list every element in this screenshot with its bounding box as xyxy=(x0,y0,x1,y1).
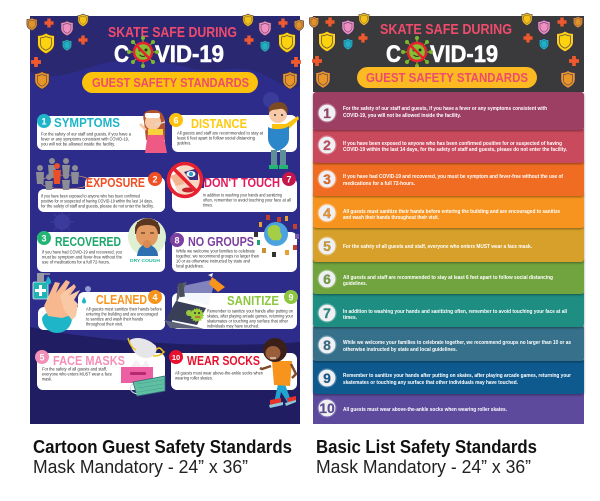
icon: coughing man xyxy=(128,218,166,256)
card 7: don't touch: DON'T TOUCH xyxy=(204,175,280,190)
band 8: otherwise instructed by state and local guidelines. xyxy=(343,347,458,353)
card 7: don't touch xyxy=(167,162,297,212)
band 10 xyxy=(313,390,584,424)
heading pill: GUEST SAFETY STANDARDS xyxy=(366,70,528,85)
icon: no touching face xyxy=(167,162,203,198)
caption: basic list poster: Basic List Safety Standards xyxy=(316,437,537,457)
card 3: recovered: RECOVERED xyxy=(55,234,121,249)
card 9: sanitize: 9 xyxy=(288,292,294,302)
poster header background xyxy=(313,16,584,92)
card 8: no groups: local guidelines. xyxy=(176,264,204,268)
card 4: cleaned: CLEANED xyxy=(96,292,147,307)
card 7: don't touch: times. xyxy=(203,202,213,208)
title: SKATE SAFE DURING xyxy=(380,21,512,38)
icon: girl with thermometer xyxy=(140,110,167,153)
band 8: While we welcome your families to celebrate together, we recommend groups no larger than 10 or as xyxy=(343,340,571,346)
band 8: 8 xyxy=(323,337,331,353)
band 3: medications for a full 72-hours. xyxy=(343,181,416,187)
icon: girl on roller skates xyxy=(260,338,296,408)
card 2: exposure: positive for or suspected of having COVID-19 within the last 14 days, xyxy=(41,198,153,204)
band 7: times. xyxy=(343,315,358,321)
panel: basic list poster xyxy=(309,13,584,424)
band 5 xyxy=(313,225,584,262)
card 3: recovered xyxy=(37,218,166,272)
card 4: cleaned xyxy=(33,273,165,333)
card 2: exposure: If you have been exposed to anyone who has been confirmed xyxy=(41,194,141,198)
band 10: All guests must wear above-the-ankle socks when wearing roller skates. xyxy=(343,407,508,413)
band 1: 1 xyxy=(323,105,331,121)
card 1: symptoms: For the safety of our staff and guests, if you have a xyxy=(41,132,132,136)
band 6: 6 xyxy=(323,271,331,287)
card 5: face masks xyxy=(35,338,165,396)
card 10: wear socks: wearing roller skates. xyxy=(175,376,213,380)
card 1: symptoms: you will not be allowed inside the facility. xyxy=(41,142,115,146)
card 1: symptoms: fever or any symptoms consistent with COVID-19, xyxy=(41,136,129,142)
title xyxy=(380,21,512,68)
card 5: face masks: 5 xyxy=(39,352,45,362)
heading pill: GUEST SAFETY STANDARDS xyxy=(92,75,249,90)
card 4: cleaned: All guests must sanitize their hands before xyxy=(86,306,163,312)
title: VID-19 xyxy=(155,41,224,68)
card 3: recovered: use of medications for a full 72-hours. xyxy=(42,260,110,264)
band 4: All guests must sanitize their hands before entering the building and are encouraged to sanitize xyxy=(343,209,560,215)
card 5: face masks: everyone who enters MUST wear a face xyxy=(42,372,113,376)
card 9: sanitize: skatemates or touching any surface that other xyxy=(207,318,289,324)
card 9: sanitize xyxy=(164,273,298,329)
card 8: no groups: 8 xyxy=(174,236,180,246)
card 8: no groups: NO GROUPS xyxy=(188,234,254,249)
band 3 xyxy=(313,159,584,196)
caption: basic list poster xyxy=(316,437,537,477)
card 2: exposure: 2 xyxy=(152,174,158,184)
title: VID-19 xyxy=(430,41,498,68)
icon: masks and tissue box xyxy=(121,338,165,396)
caption: cartoon poster: Cartoon Guest Safety Standards xyxy=(33,437,292,457)
heading pill xyxy=(357,67,537,88)
band 3: 3 xyxy=(323,171,331,187)
title: C xyxy=(114,41,129,68)
band 10: 10 xyxy=(319,400,335,416)
band 4: and wash their hands throughout their visit. xyxy=(343,215,440,221)
card 3: recovered: 3 xyxy=(41,234,47,244)
card 3: recovered: must be symptom and fever-free without the xyxy=(42,254,123,260)
card 10: wear socks: All guests must wear above-the-ankle socks when xyxy=(175,370,264,376)
band 4 xyxy=(313,192,584,228)
band 2: 2 xyxy=(323,137,331,153)
band 1 xyxy=(313,92,584,130)
card 9: sanitize: Remember to sanitize your hands after putting on xyxy=(207,308,294,314)
card 3: recovered: If you have had COVID-19 and recovered, you xyxy=(42,250,123,254)
card 5: face masks: FACE MASKS xyxy=(53,353,125,368)
card 8: no groups xyxy=(170,215,299,272)
faint background sun and virus xyxy=(50,92,279,234)
card 2: exposure: EXPOSURE xyxy=(86,175,145,190)
icon: spray and laptop xyxy=(164,273,225,329)
card 1: symptoms: 1 xyxy=(41,116,47,126)
band 7 xyxy=(313,291,584,327)
band 3: If you have had COVID-19 and recovered, you must be symptom and fever-free without the use of xyxy=(343,174,563,180)
card 5: face masks: For the safety of all guests and staff, xyxy=(42,366,107,372)
lower dark band xyxy=(30,327,300,424)
band 1: For the safety of our staff and guests, if you have a fever or any symptoms consistent with xyxy=(343,106,547,112)
heading pill xyxy=(82,72,258,93)
card 6: distance: 6 xyxy=(173,116,179,126)
card 8: no groups: together, we recommend groups no larger than xyxy=(176,254,260,258)
card 7: don't touch: 7 xyxy=(286,174,292,184)
caption: basic list poster: Mask Mandatory - 24” x 36” xyxy=(316,457,531,477)
card 10: wear socks: 10 xyxy=(172,353,180,362)
card 1: symptoms: SYMPTOMS xyxy=(54,115,120,130)
card 10: wear socks xyxy=(169,338,297,408)
card 8: no groups: 10 or as otherwise instructed by state and xyxy=(176,258,251,264)
band 7: In addition to washing your hands and sanitizing often, remember to avoid touching your face at all xyxy=(343,309,568,315)
band 9: skatemates or touching any surface that other individuals may have touched. xyxy=(343,380,519,386)
card 6: distance: guidelines. xyxy=(177,140,191,146)
card 6: distance xyxy=(169,102,299,169)
band 4: 4 xyxy=(323,205,331,221)
card 4: cleaned: entering the building and are encouraged xyxy=(86,312,159,316)
icon: washing hands and sanitizer xyxy=(33,273,91,333)
card 7: don't touch: often, remember to avoid touching your face at all xyxy=(203,198,291,202)
header band xyxy=(30,16,300,88)
card 4: cleaned: 4 xyxy=(152,292,158,302)
band 7: 7 xyxy=(323,305,331,321)
card 6: distance: least 6 feet apart to follow social distancing xyxy=(177,136,256,140)
band 5: 5 xyxy=(323,238,331,254)
band 6: All guests and staff are recommended to stay at least 6 feet apart to follow social distancing xyxy=(343,275,553,281)
band 1: COVID-19, you will not be allowed inside the facility. xyxy=(343,113,462,119)
band 8 xyxy=(313,325,584,361)
band 5: For the safety of all guests and staff, everyone who enters MUST wear a face mask. xyxy=(343,244,533,250)
caption: cartoon poster: Mask Mandatory - 24” x 36” xyxy=(33,457,248,477)
card 7: don't touch: In addition to washing your hands and sanitizing xyxy=(203,192,283,198)
band 2: If you have been exposed to anyone who has been confirmed positive for or suspected of having xyxy=(343,141,562,147)
card 10: wear socks: WEAR SOCKS xyxy=(187,353,260,368)
card 9: sanitize: skates, after playing arcade games, returning your xyxy=(207,314,294,318)
band 2 xyxy=(313,127,584,163)
icon: boy with shield xyxy=(268,102,299,169)
band 9: 9 xyxy=(323,370,331,386)
band 6: guidelines. xyxy=(343,281,368,287)
card 4: cleaned: to sanitize and wash their hands xyxy=(86,316,143,322)
title: C xyxy=(386,41,401,68)
header decorations xyxy=(309,13,583,88)
card 6: distance: DISTANCE xyxy=(191,116,247,131)
icon: crowd of people xyxy=(36,158,91,190)
band 9 xyxy=(313,358,584,394)
caption: cartoon poster xyxy=(33,437,292,477)
poster background xyxy=(30,16,300,424)
card 1: symptoms xyxy=(37,110,167,153)
card 9: sanitize: individuals may have touched. xyxy=(207,324,259,328)
title xyxy=(108,24,237,68)
card 9: sanitize: SANITIZE xyxy=(227,293,279,308)
card 8: no groups: While we welcome your families to celebrate xyxy=(176,248,256,254)
icon: globe with people xyxy=(254,215,299,257)
card 4: cleaned: throughout their visit. xyxy=(86,322,123,326)
panel: cartoon poster xyxy=(27,14,304,424)
label: dry cough: DRY COUGH xyxy=(130,258,161,264)
card 2: exposure xyxy=(36,158,165,212)
card 5: face masks: mask. xyxy=(42,376,52,382)
band 9: Remember to sanitize your hands after putting on skates, after playing arcade games, returning your xyxy=(343,373,571,379)
header decorations xyxy=(27,14,304,89)
band 6 xyxy=(313,258,584,294)
card 2: exposure: for the safety of staff and guests, please do not enter the facility. xyxy=(41,204,154,208)
band 2: COVID-19 within the last 14 days, for the safety of staff and guests, please do not enter the facility. xyxy=(343,147,568,153)
card 6: distance: All guests and staff are recommended to stay at xyxy=(177,130,264,136)
title: SKATE SAFE DURING xyxy=(108,24,237,41)
